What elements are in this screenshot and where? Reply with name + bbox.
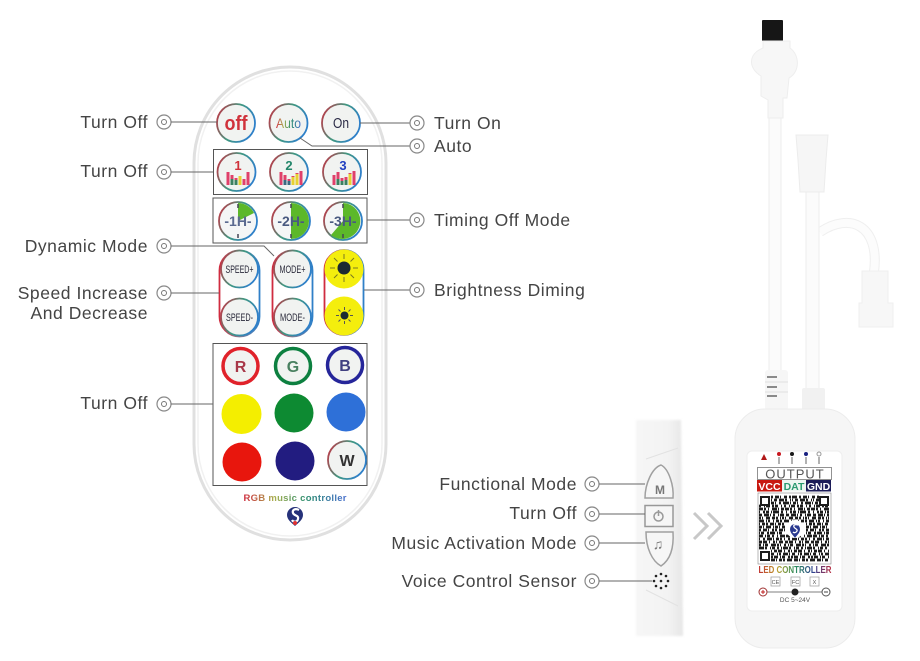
callout: dynamic mode: [25, 236, 274, 256]
callout: turn off, music: [80, 161, 213, 181]
callout: turn off, side: Turn Off: [509, 503, 577, 523]
button: on: [322, 104, 360, 142]
button: timer 3H: -3H-: [329, 213, 357, 229]
cable: strain relief rings: [765, 370, 788, 410]
button: on: On: [333, 115, 349, 132]
callout: turn off, colours: [80, 393, 213, 413]
mode buttons: [272, 250, 312, 336]
callout: speed increase and decrease: And Decrease: [30, 303, 148, 323]
icon: warning and wire dots: [761, 452, 821, 464]
callout: speed increase and decrease: Speed Increase: [18, 283, 148, 303]
icon: certification marks: CE: [772, 580, 780, 586]
callout: brightness diming: Brightness Diming: [434, 280, 585, 300]
button: speed minus: SPEED-: [226, 312, 253, 324]
button: G: G: [287, 359, 299, 376]
button: R: [223, 348, 258, 384]
cables and connectors: [751, 20, 893, 412]
callout: brightness diming: [364, 280, 585, 300]
callout: functional mode: [439, 474, 645, 494]
callout: auto: [300, 136, 472, 156]
callout: timing off mode: Timing Off Mode: [434, 210, 571, 230]
power polarity diagram: [759, 588, 830, 604]
button: music 3: [323, 153, 361, 191]
side view of controller: [636, 420, 683, 636]
button: music 3: 3: [339, 158, 347, 173]
label sticker: [747, 451, 842, 611]
button: R: R: [235, 359, 247, 376]
icon: certification marks: FC: [792, 580, 799, 586]
remote control body: [194, 67, 386, 540]
button: W: W: [339, 453, 355, 470]
callout: dynamic mode: Dynamic Mode: [25, 236, 148, 256]
connector: white plug body: [751, 41, 797, 118]
button: music 1: [218, 153, 256, 191]
button: B: [328, 348, 362, 382]
power and auto buttons: [217, 104, 360, 142]
cable: branch wire inner: [820, 223, 875, 272]
callout: functional mode: Functional Mode: [439, 474, 577, 494]
callout: turn off, left: Turn Off: [80, 112, 148, 132]
speed buttons: [220, 250, 260, 336]
button: M: M: [655, 483, 665, 497]
button: power: [645, 506, 673, 526]
callout: speed increase and decrease: [18, 283, 219, 323]
button: M: [645, 465, 673, 498]
button: green: [274, 394, 314, 432]
button: B: B: [339, 358, 351, 375]
callout: timing off mode: [367, 210, 571, 230]
callout: turn on: Turn On: [434, 113, 501, 133]
button: mode plus: MODE+: [280, 264, 306, 276]
callout: turn off, left: [80, 112, 217, 132]
button: brightness up: [324, 250, 364, 288]
button: blue: [326, 392, 366, 432]
button: timer 3H: [324, 202, 362, 240]
icon: certification marks: X: [813, 580, 817, 586]
callout: turn on: [360, 113, 501, 133]
icon: brand logo: [287, 507, 303, 526]
button: mode minus: MODE-: [280, 312, 305, 324]
callout: turn off, colours: Turn Off: [80, 393, 148, 413]
music mode buttons box: [214, 150, 368, 194]
button: navy: [276, 442, 314, 480]
VCC DAT GND labels: DAT: [784, 481, 805, 493]
connector: branch plug: [859, 271, 893, 327]
cable: main wire: [769, 118, 781, 373]
button: red: [222, 442, 262, 482]
button: G: [276, 348, 310, 384]
brightness buttons: [324, 250, 364, 336]
colour buttons box: [213, 344, 367, 486]
arrow: double chevron: [694, 513, 721, 539]
button: timer 1H: -1H-: [224, 213, 252, 229]
button: W: [328, 441, 366, 479]
callout: turn off, music: Turn Off: [80, 161, 148, 181]
button: timer 2H: [272, 202, 310, 240]
button: speed plus: SPEED+: [226, 264, 254, 276]
button: music 2: [270, 153, 308, 191]
connector: small plug: [796, 135, 828, 192]
brand text: RGB music controller: [244, 493, 347, 504]
callout: turn off, side: [509, 503, 645, 523]
icon: certification marks: [771, 577, 819, 586]
button: music 1: 1: [234, 158, 242, 173]
button: timer 2H: -2H-: [277, 213, 305, 229]
callout: voice control sensor: Voice Control Sensor: [402, 571, 577, 591]
timer buttons box: [213, 198, 367, 243]
QR code: [758, 493, 831, 564]
callout: music activation mode: Music Activation Mode: [391, 533, 577, 553]
VCC DAT GND labels: VCC: [758, 481, 781, 493]
button: off: off: [224, 113, 248, 135]
output heading: OUTPUT: [765, 466, 825, 482]
button: auto: Auto: [276, 115, 301, 131]
power polarity diagram: DC 5~24V: [780, 597, 811, 604]
icon: voice sensor holes: [653, 573, 669, 589]
connector: black tip: [762, 20, 783, 41]
LED controller box: [735, 409, 855, 648]
button: brightness down: [324, 296, 364, 336]
button: music: ♫: [653, 536, 663, 552]
LED controller text: LED CONTROLLER: [758, 565, 832, 576]
cable: branch wire: [820, 223, 875, 272]
callout: auto: Auto: [434, 136, 472, 156]
button: music 2: 2: [285, 158, 293, 173]
VCC DAT GND labels: [757, 480, 831, 493]
VCC DAT GND labels: GND: [807, 481, 831, 493]
cable: second wire base: [802, 388, 825, 412]
button: timer 1H: [219, 202, 257, 240]
button: auto: [270, 104, 308, 142]
button: music: [646, 532, 673, 566]
button: yellow: [222, 394, 262, 434]
cable: second wire: [806, 190, 819, 390]
button: off: [217, 104, 255, 142]
